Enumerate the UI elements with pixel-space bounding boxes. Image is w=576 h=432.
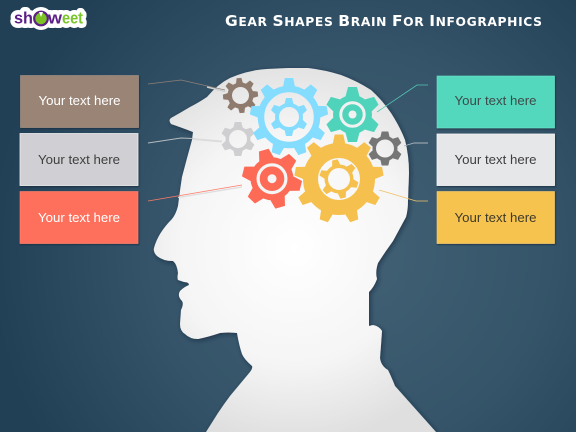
connector: light gray gear [148,138,222,143]
box: coral: Your text here [38,211,120,225]
head silhouette [154,68,436,432]
logo [14,7,83,30]
box: yellow [437,192,554,244]
gear: teal [325,87,380,142]
box: coral [20,192,138,244]
box: teal [437,76,554,128]
box: brown [20,76,138,128]
connector: teal gear [377,85,428,112]
logo: sh [14,8,33,28]
box: teal: Your text here [454,94,537,108]
gear: dark gray [368,132,402,166]
connector: brown gear [148,80,225,92]
connector: red gear [148,185,242,201]
gear: brown [223,78,258,113]
box: pale gray right [437,134,554,186]
logo: eet [62,8,83,28]
title: GEAR SHAPES BRAIN FOR INFOGRAPHICS [225,12,542,30]
inner gear: yellow [319,159,359,199]
logo: w [47,8,63,28]
box: brown: Your text here [38,94,121,108]
gear: light gray [221,122,255,156]
box: pale gray right: Your text here [454,153,537,167]
connector: yellow gear [379,190,428,201]
inner gear: blue [270,98,308,136]
gear: blue [250,78,328,156]
gear: yellow [294,134,384,223]
gear: red [241,148,303,209]
box: light gray left: Your text here [38,153,120,167]
box: yellow: Your text here [454,211,537,225]
box: light gray left [20,134,138,186]
logo: w [47,8,63,28]
logo: sh [14,8,33,28]
logo: eet [62,8,83,28]
connector: dark gray gear [404,143,428,146]
